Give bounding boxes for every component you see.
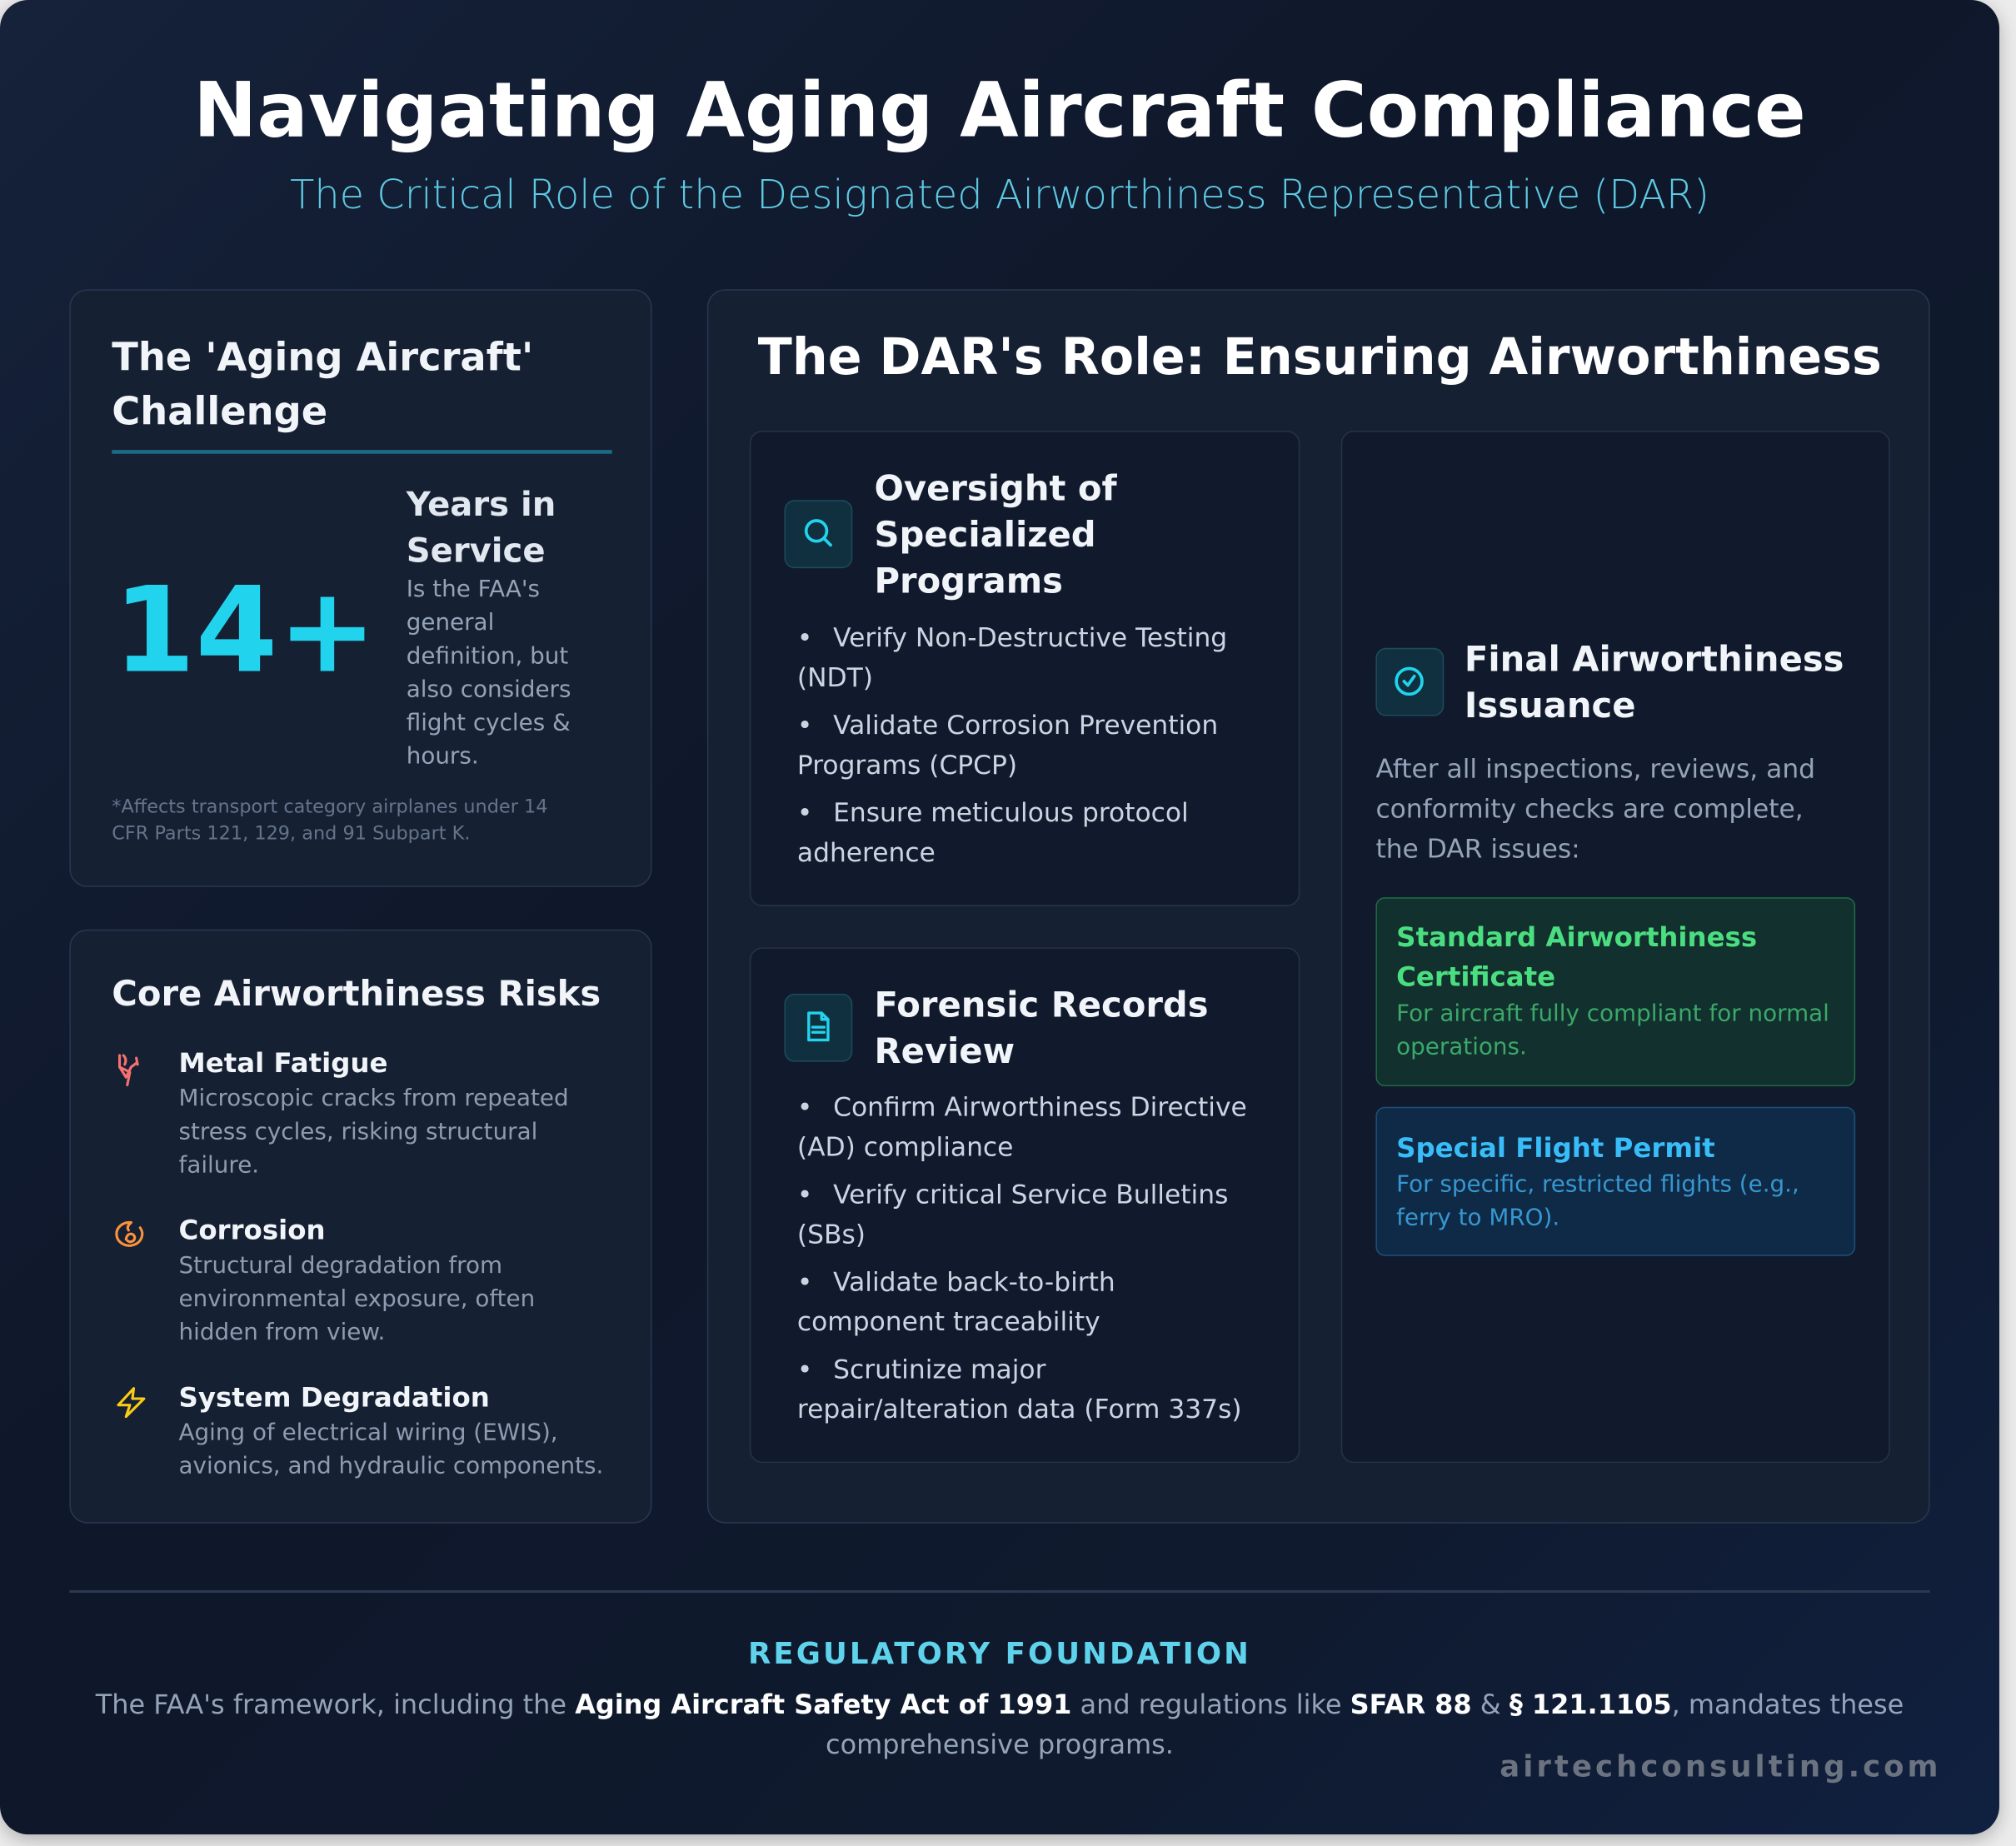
box: standard certificate: Standard Airworthiness — [1396, 921, 1757, 953]
box: standard certificate: operations. — [1396, 1034, 1527, 1060]
footnote: CFR Parts 121, 129, and 91 Subpart K. — [112, 824, 470, 845]
risk: system degradation: System Degradation — [179, 1382, 490, 1413]
bullet list: (NDT) — [797, 662, 873, 693]
stat description — [407, 576, 571, 770]
icon: document — [784, 994, 852, 1062]
stat description: hours. — [407, 743, 479, 770]
footnote — [112, 797, 547, 845]
heading: core risks: Core Airworthiness Risks — [112, 975, 601, 1015]
stat description: general — [407, 609, 494, 636]
footer text: comprehensive programs. — [826, 1729, 1174, 1760]
stat label: Years in — [407, 486, 556, 525]
panel: aging aircraft challenge — [69, 289, 652, 887]
bullet list: Scrutinize major — [833, 1354, 1045, 1384]
card title — [875, 986, 1209, 1072]
risk: corrosion: Corrosion — [179, 1215, 326, 1245]
stat: 14+: 14+ — [113, 561, 377, 700]
stat description: also considers — [407, 676, 571, 703]
card title — [1465, 641, 1844, 726]
bullet list: Validate Corrosion Prevention — [833, 710, 1218, 741]
bullet list: Verify critical Service Bulletins — [833, 1179, 1228, 1210]
icon: metal fatigue — [118, 1054, 139, 1086]
description: the DAR issues: — [1375, 833, 1580, 864]
bullet list: • — [797, 797, 812, 828]
risk: corrosion — [179, 1215, 535, 1346]
footer heading: REGULATORY FOUNDATION — [748, 1638, 1251, 1671]
bullet list — [797, 1091, 1247, 1424]
description — [1375, 753, 1815, 864]
panel: DAR's role — [707, 289, 1930, 1524]
bullet list: • — [797, 1266, 812, 1297]
box: standard certificate: For aircraft fully compliant for normal — [1396, 1000, 1829, 1027]
bullet list: • — [797, 1179, 812, 1210]
bullet list: (AD) compliance — [797, 1131, 1013, 1162]
card title: Oversight of — [875, 469, 1117, 509]
footer text: The FAA's framework, including the Aging Aircraft Safety Act of 1991 and regulations like SFAR 88 & § 121.1105, mandates these — [96, 1689, 1904, 1720]
card title: Final Airworthiness — [1465, 641, 1844, 680]
card: oversight of specialized programs — [750, 431, 1300, 906]
bullet list: • — [797, 1354, 812, 1384]
stat label: Service — [407, 532, 546, 571]
risk: metal fatigue — [179, 1048, 569, 1179]
heading: DAR role: The DAR's Role: Ensuring Airworthiness — [758, 329, 1882, 387]
risk: corrosion: environmental exposure, often — [179, 1285, 535, 1313]
risk: metal fatigue: Microscopic cracks from repeated — [179, 1085, 569, 1112]
stat description: definition, but — [407, 643, 568, 670]
footer text — [95, 1689, 1904, 1760]
bullet list — [797, 622, 1227, 868]
risk: corrosion: Structural degradation from — [179, 1252, 502, 1279]
risk: metal fatigue: stress cycles, risking structural — [179, 1119, 537, 1145]
stat description: flight cycles & — [407, 710, 571, 736]
box: standard certificate: Certificate — [1396, 961, 1555, 992]
risk: corrosion: hidden from view. — [179, 1319, 385, 1346]
box: special flight permit — [1375, 1107, 1855, 1256]
bullet list: Verify Non-Destructive Testing — [833, 622, 1227, 653]
risk: metal fatigue: failure. — [179, 1152, 259, 1179]
bullet list: repair/alteration data (Form 337s) — [797, 1394, 1242, 1424]
bullet list: Ensure meticulous protocol — [833, 797, 1189, 828]
bullet list: • — [797, 1091, 812, 1122]
card title — [875, 469, 1117, 601]
risk: metal fatigue: Metal Fatigue — [179, 1048, 388, 1079]
risk: system degradation — [178, 1382, 603, 1479]
stat label — [406, 486, 556, 571]
risk: system degradation: avionics, and hydraulic components. — [179, 1453, 603, 1479]
risk: system degradation: Aging of electrical wiring (EWIS), — [179, 1419, 558, 1446]
subtitle: The Critical Role of the Designated Airworthiness Representative (DAR) — [290, 172, 1709, 218]
description: conformity checks are complete, — [1375, 793, 1804, 824]
box: special flight permit: ferry to MRO). — [1396, 1205, 1559, 1231]
icon: check circle — [1375, 648, 1444, 716]
icon: lightning — [117, 1387, 145, 1418]
card title: Programs — [875, 561, 1063, 601]
card: final airworthiness issuance — [1341, 431, 1890, 1463]
bullet list: Programs (CPCP) — [797, 750, 1017, 781]
bullet list: Confirm Airworthiness Directive — [833, 1091, 1247, 1122]
bullet list: Validate back-to-birth — [833, 1266, 1115, 1297]
heading: aging aircraft challenge — [112, 336, 533, 435]
card title: Forensic Records — [875, 986, 1209, 1025]
title: Navigating Aging Aircraft Compliance — [193, 66, 1806, 154]
box: standard certificate — [1375, 897, 1855, 1086]
box: special flight permit: Special Flight Permit — [1396, 1133, 1715, 1164]
stat description: Is the FAA's — [407, 576, 540, 603]
card title: Review — [875, 1032, 1015, 1072]
bullet list: • — [797, 710, 812, 741]
heading: aging aircraft challenge: The 'Aging Aircraft' — [112, 336, 533, 381]
bullet list: adherence — [797, 837, 936, 868]
card title: Issuance — [1465, 686, 1635, 726]
footnote: *Affects transport category airplanes under 14 — [112, 797, 547, 817]
description: After all inspections, reviews, and — [1375, 753, 1815, 784]
watermark: airtechconsulting.com — [1500, 1751, 1942, 1784]
card title: Specialized — [875, 516, 1096, 556]
bullet list: (SBs) — [797, 1219, 866, 1250]
heading: aging aircraft challenge: Challenge — [112, 390, 327, 435]
bullet list: component traceability — [797, 1306, 1100, 1337]
bullet list: • — [797, 622, 812, 653]
panel: core airworthiness risks — [69, 930, 652, 1524]
icon: corrosion — [115, 1221, 143, 1247]
card: forensic records review — [750, 947, 1300, 1463]
icon: search — [784, 500, 852, 568]
box: special flight permit: For specific, restricted flights (e.g., — [1396, 1171, 1799, 1198]
